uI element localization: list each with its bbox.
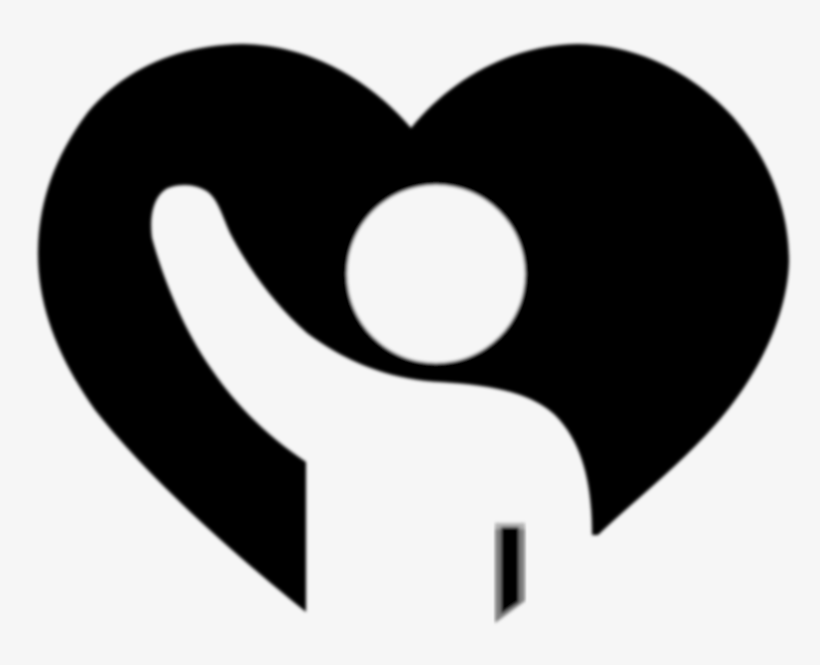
head circle xyxy=(347,185,525,363)
heart shape xyxy=(38,44,789,612)
leg gap xyxy=(495,523,525,623)
